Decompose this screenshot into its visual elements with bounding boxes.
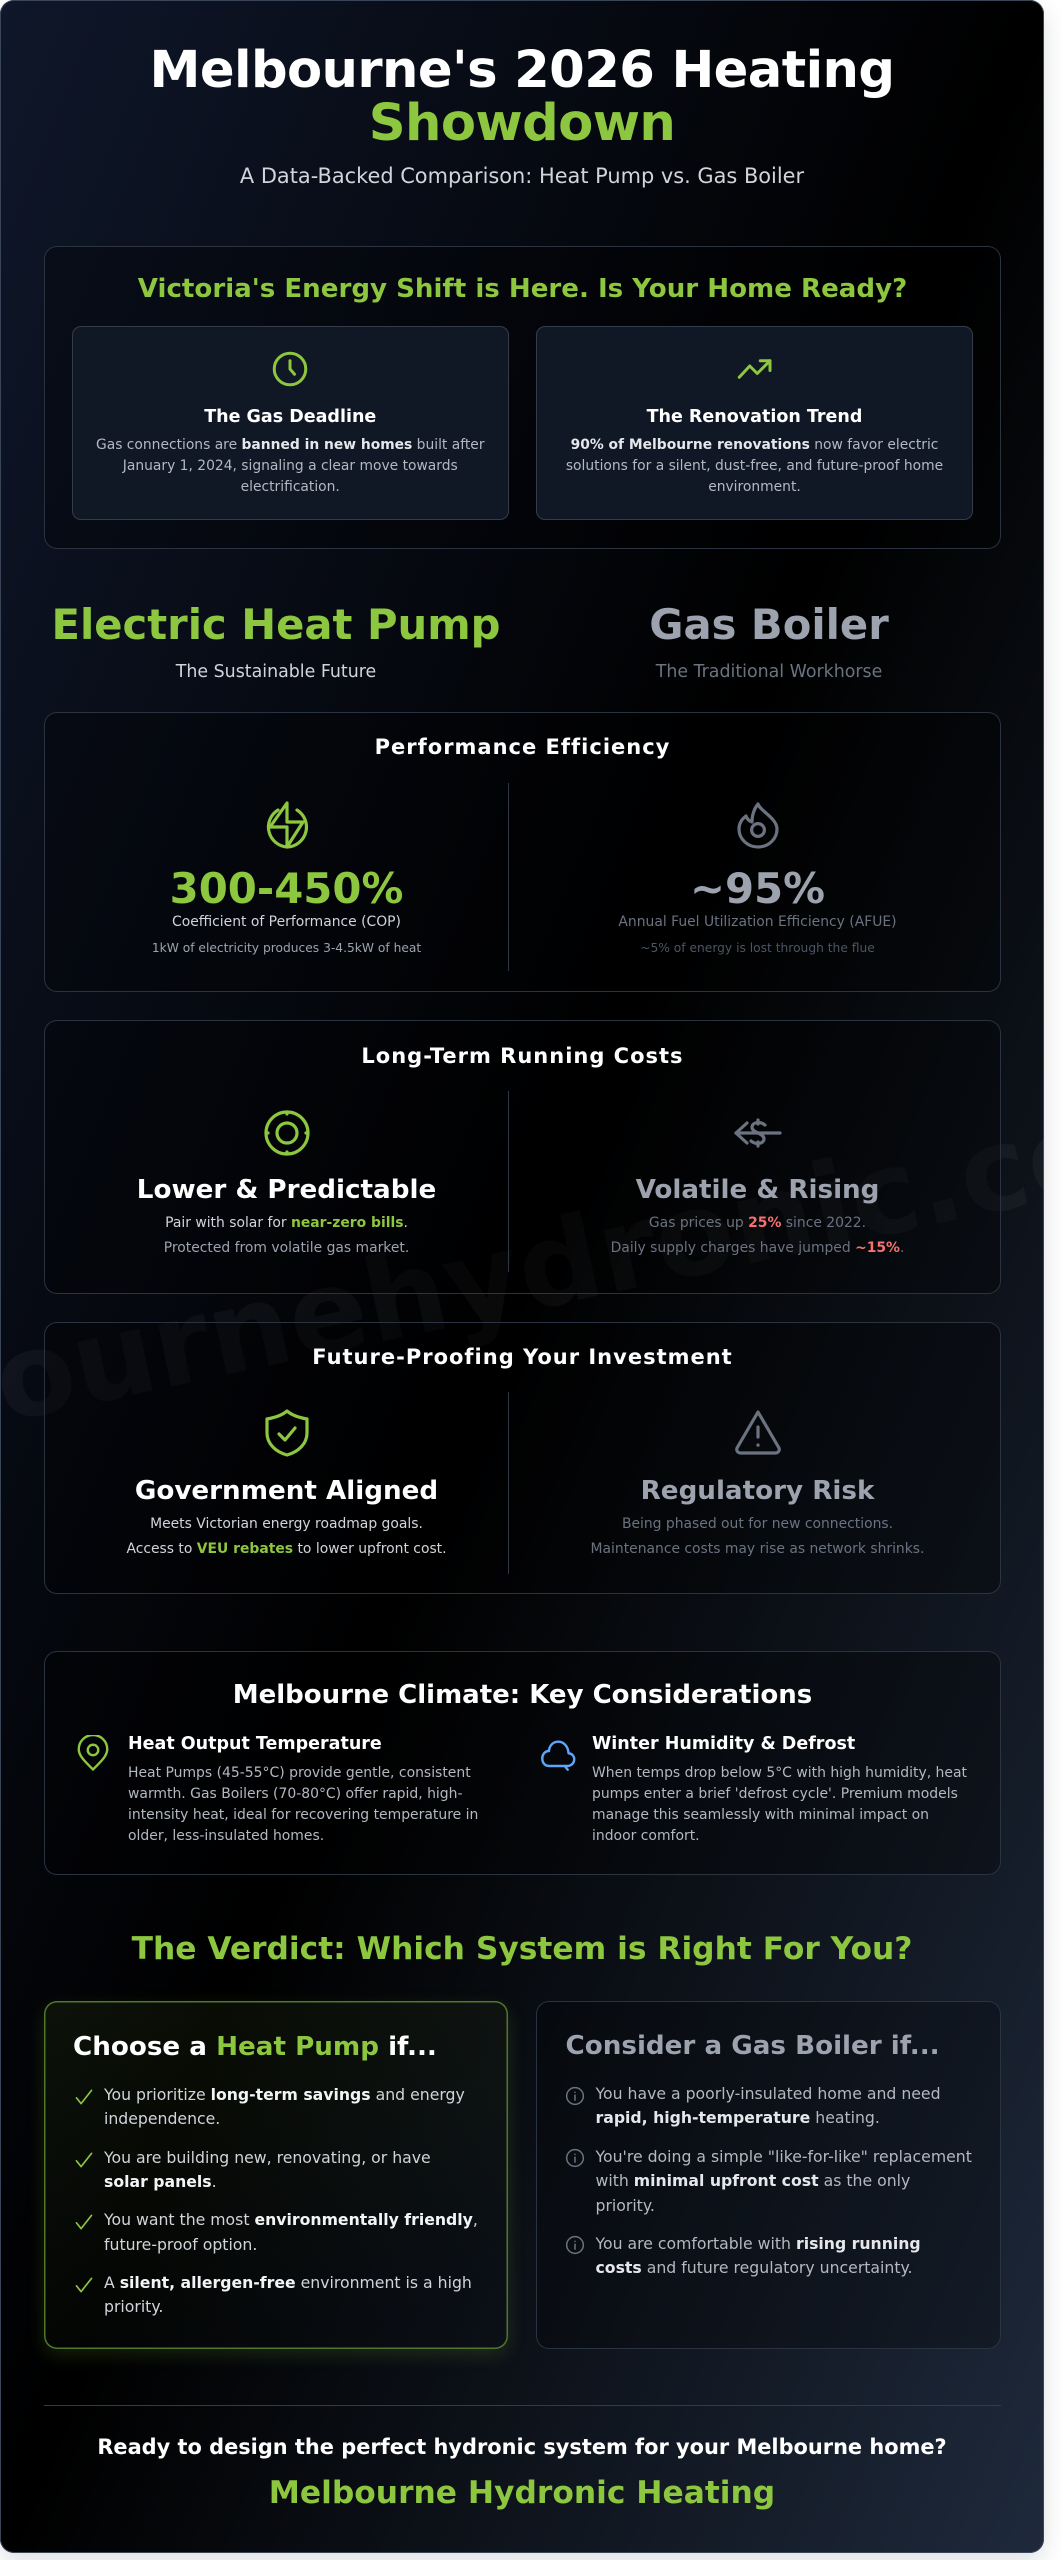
icon: clock <box>272 352 308 386</box>
detail lines: Pair with solar for near-zero bills. <box>165 1215 408 1231</box>
item text: pumps enter a brief 'defrost cycle'. Premium models <box>592 1786 958 1802</box>
item heading: Winter Humidity & Defrost <box>592 1734 855 1754</box>
reason: priority. <box>596 2196 655 2215</box>
tagline: The Traditional Workhorse <box>656 662 882 682</box>
icon: gear <box>264 1110 310 1156</box>
card: renovation trend <box>536 326 973 520</box>
detail lines <box>126 1516 447 1556</box>
detail lines <box>164 1215 409 1256</box>
panel heading: Future-Proofing Your Investment <box>312 1345 733 1369</box>
icon: trending up <box>738 359 772 379</box>
tagline: The Sustainable Future <box>176 662 376 682</box>
call to action: Ready to design the perfect hydronic system for your Melbourne home? <box>97 2435 947 2459</box>
reason: You are comfortable with rising running <box>596 2234 921 2253</box>
reason: You are building new, renovating, or have <box>104 2148 431 2166</box>
reason: A silent, allergen-free environment is a high <box>104 2273 472 2292</box>
panel heading: Long-Term Running Costs <box>361 1044 684 1068</box>
panel heading: Consider a Gas Boiler if... <box>566 2031 940 2061</box>
reason: solar panels. <box>104 2172 217 2191</box>
icon: flame <box>737 802 779 849</box>
item text: intensity heat, ideal for recovering temperature in <box>128 1806 478 1822</box>
brand name: Melbourne Hydronic Heating <box>269 2475 775 2511</box>
reason: You prioritize long-term savings and energy <box>104 2085 465 2104</box>
panel: running costs <box>44 1020 1001 1294</box>
card heading: The Gas Deadline <box>204 407 376 427</box>
column: boiler future <box>591 1410 924 1556</box>
reason: You have a poorly-insulated home and need <box>596 2084 941 2103</box>
detail lines: Maintenance costs may rise as network shrinks. <box>591 1540 924 1556</box>
detail lines: Being phased out for new connections. <box>622 1516 893 1532</box>
detail lines: Meets Victorian energy roadmap goals. <box>150 1516 423 1532</box>
column: heat pump future <box>126 1409 447 1556</box>
stat label: Coefficient of Performance (COP) <box>172 914 401 930</box>
verdict heading: The Verdict: Which System is Right For You? <box>132 1931 912 1967</box>
card text: solutions for a silent, dust-free, and future-proof home <box>566 458 943 474</box>
card heading: The Renovation Trend <box>647 407 862 427</box>
card text <box>566 436 943 494</box>
reason <box>104 2210 478 2254</box>
panel: choose heat pump <box>44 2001 508 2349</box>
panel: climate <box>44 1651 1001 1875</box>
card text: January 1, 2024, signaling a clear move towards <box>123 458 458 474</box>
title: Showdown <box>369 92 675 152</box>
reason <box>104 2085 465 2128</box>
icon: info <box>566 2086 584 2106</box>
icon: map pin <box>78 1735 108 1771</box>
column: heat pump costs <box>137 1110 436 1256</box>
subtitle: A Data-Backed Comparison: Heat Pump vs. Gas Boiler <box>240 164 804 188</box>
card text: 90% of Melbourne renovations now favor electric <box>571 436 938 452</box>
column header: heat pump <box>52 600 500 682</box>
heading: Lower & Predictable <box>137 1175 436 1205</box>
reason: costs and future regulatory uncertainty. <box>596 2258 913 2277</box>
icon: info <box>565 2235 585 2255</box>
icon: shield check <box>265 1409 309 1457</box>
detail lines: Access to VEU rebates to lower upfront cost. <box>126 1540 447 1556</box>
icon: bolt <box>266 801 308 849</box>
card text: Gas connections are banned in new homes built after <box>96 436 485 452</box>
item text: indoor comfort. <box>592 1828 700 1844</box>
icon: warning triangle <box>735 1410 781 1455</box>
icon: check <box>76 2152 92 2168</box>
panel heading: Performance Efficiency <box>375 735 670 759</box>
reason <box>596 2145 972 2218</box>
item text: warmth. Gas Boilers (70-80°C) offer rapid, high- <box>128 1786 463 1802</box>
column: boiler costs <box>611 1118 904 1256</box>
card text <box>96 436 485 494</box>
panel: consider gas boiler <box>536 2001 1001 2349</box>
heading: Gas Boiler <box>649 600 889 649</box>
stat note: ~5% of energy is lost through the flue <box>640 941 875 955</box>
reason: You want the most environmentally friendly, <box>104 2210 478 2229</box>
column header: gas boiler <box>649 600 889 682</box>
reason <box>596 2084 941 2127</box>
icon: cloud <box>541 1740 576 1771</box>
climate item: heat output <box>128 1734 478 1844</box>
panel heading: Melbourne Climate: Key Considerations <box>233 1680 812 1710</box>
icon: info <box>565 2148 585 2168</box>
detail lines: Daily supply charges have jumped ~15%. <box>611 1240 904 1256</box>
reason <box>104 2148 431 2191</box>
item text: older, less-insulated homes. <box>128 1828 324 1844</box>
detail lines <box>611 1215 904 1256</box>
column: boiler efficiency <box>618 802 897 955</box>
detail lines: Protected from volatile gas market. <box>164 1240 409 1256</box>
icon: check <box>76 2090 92 2104</box>
reason: priority. <box>104 2297 163 2316</box>
stat note: 1kW of electricity produces 3-4.5kW of heat <box>152 941 421 955</box>
stat label: Annual Fuel Utilization Efficiency (AFUE) <box>618 914 897 930</box>
heading: Regulatory Risk <box>641 1476 874 1506</box>
item text <box>128 1764 478 1844</box>
panel: energy shift <box>44 246 1001 549</box>
heading: Government Aligned <box>135 1476 438 1506</box>
heading: Electric Heat Pump <box>52 600 500 649</box>
detail lines <box>591 1516 924 1556</box>
item text <box>592 1764 967 1844</box>
item text: When temps drop below 5°C with high humidity, heat <box>592 1764 967 1780</box>
panel: performance efficiency <box>44 712 1001 992</box>
reason: You're doing a simple "like-for-like" replacement <box>596 2147 972 2166</box>
reason: future-proof option. <box>104 2235 257 2254</box>
reason <box>596 2232 921 2281</box>
column: heat pump efficiency <box>152 801 421 955</box>
heading: Volatile & Rising <box>636 1175 879 1205</box>
reason: with minimal upfront cost as the only <box>596 2171 910 2190</box>
icon: dollar arrow <box>734 1118 782 1148</box>
reason: independence. <box>104 2109 220 2128</box>
item text: manage this seamlessly with minimal impact on <box>592 1806 929 1822</box>
panel: future proofing <box>44 1322 1001 1594</box>
detail lines: Gas prices up 25% since 2022. <box>649 1215 866 1231</box>
climate item: humidity <box>592 1734 967 1844</box>
reason <box>104 2273 472 2316</box>
icon: check <box>76 2214 92 2230</box>
card text: electrification. <box>241 478 340 494</box>
title: Melbourne's 2026 Heating <box>150 40 894 100</box>
reason: rapid, high-temperature heating. <box>596 2108 880 2127</box>
stat: 300-450% <box>170 864 403 913</box>
icon: check <box>76 2278 92 2292</box>
card text: environment. <box>708 478 801 494</box>
card: gas deadline <box>72 326 508 520</box>
stat: ~95% <box>690 864 825 913</box>
panel heading: Choose a Heat Pump if... <box>73 2032 437 2062</box>
panel heading: Victoria's Energy Shift is Here. Is Your Home Ready? <box>138 274 907 304</box>
item text: Heat Pumps (45-55°C) provide gentle, consistent <box>128 1764 471 1780</box>
title <box>150 40 894 152</box>
item heading: Heat Output Temperature <box>128 1734 382 1754</box>
